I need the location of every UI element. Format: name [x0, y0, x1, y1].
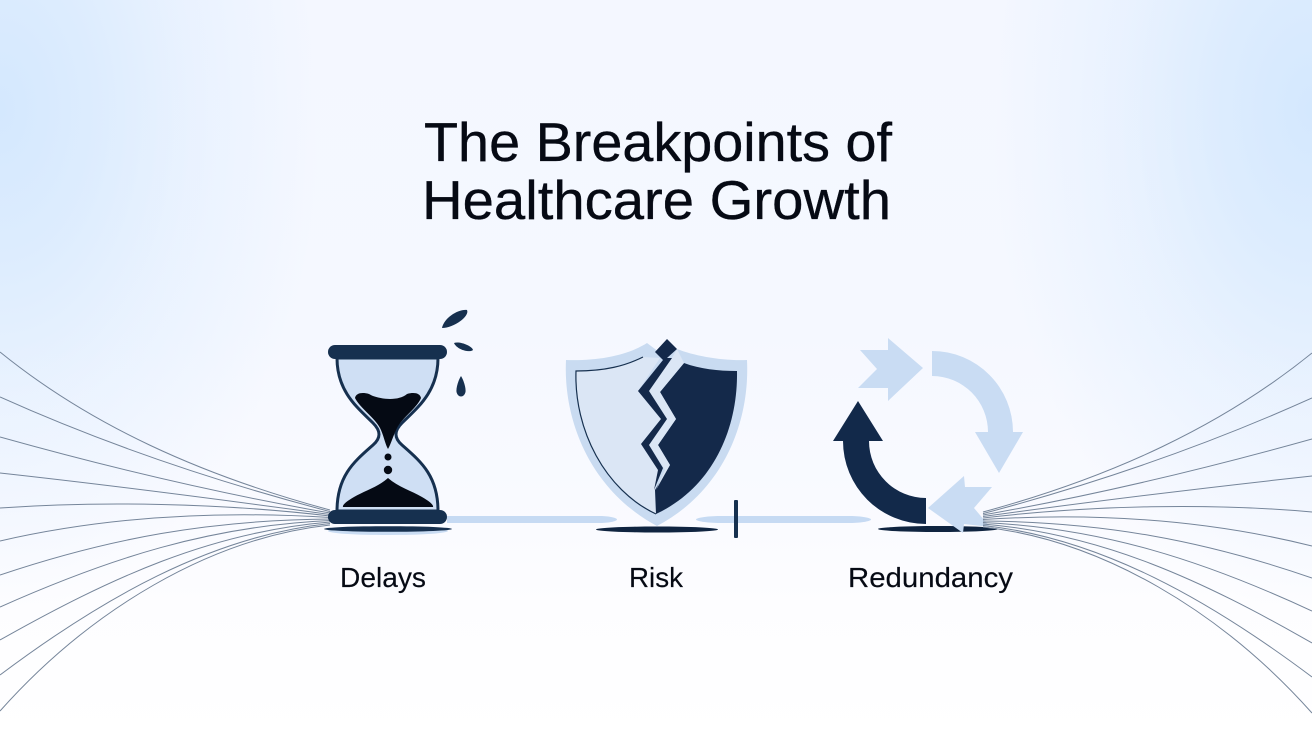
arrow dark: [833, 401, 926, 524]
arrow bottom light: [928, 476, 992, 533]
shield thin outline: [576, 357, 656, 514]
title: Healthcare Growth: [422, 169, 891, 231]
label: Risk: Risk: [629, 562, 684, 593]
top cap: [328, 345, 447, 359]
arrow right light: [932, 351, 1023, 473]
sand bottom: [343, 478, 433, 507]
flying drops: [442, 310, 473, 396]
label: Delays: Delays: [340, 562, 426, 593]
connector bar: delays to risk: [447, 516, 617, 523]
arrow top-left light: [858, 338, 923, 401]
shield left panel: [576, 357, 661, 514]
title: [422, 111, 893, 231]
shield ground ellipse: [596, 526, 718, 532]
base shadow: [328, 527, 448, 535]
vertical tick: [734, 500, 738, 538]
icon: hourglass: [324, 310, 473, 535]
shield outer: [566, 343, 747, 526]
ground ellipse: [878, 526, 998, 532]
label: Redundancy: Redundancy: [848, 562, 1013, 593]
icon: cracked shield: [566, 339, 747, 532]
bottom cap: [328, 510, 447, 524]
title: The Breakpoints of: [424, 111, 893, 173]
crack light gap: [649, 349, 684, 490]
shield dark panel: [655, 363, 737, 514]
base ellipse: [324, 526, 452, 532]
falling sand grains: [384, 454, 392, 474]
sand top: [355, 393, 421, 449]
hourglass glass: [337, 358, 438, 511]
converging lines: left: [0, 352, 330, 711]
converging lines: right: [983, 353, 1312, 713]
crack dark sliver: [638, 339, 677, 490]
icon: redundancy cycle arrows: [833, 338, 1023, 533]
connector bar: risk to redundancy: [696, 516, 871, 523]
